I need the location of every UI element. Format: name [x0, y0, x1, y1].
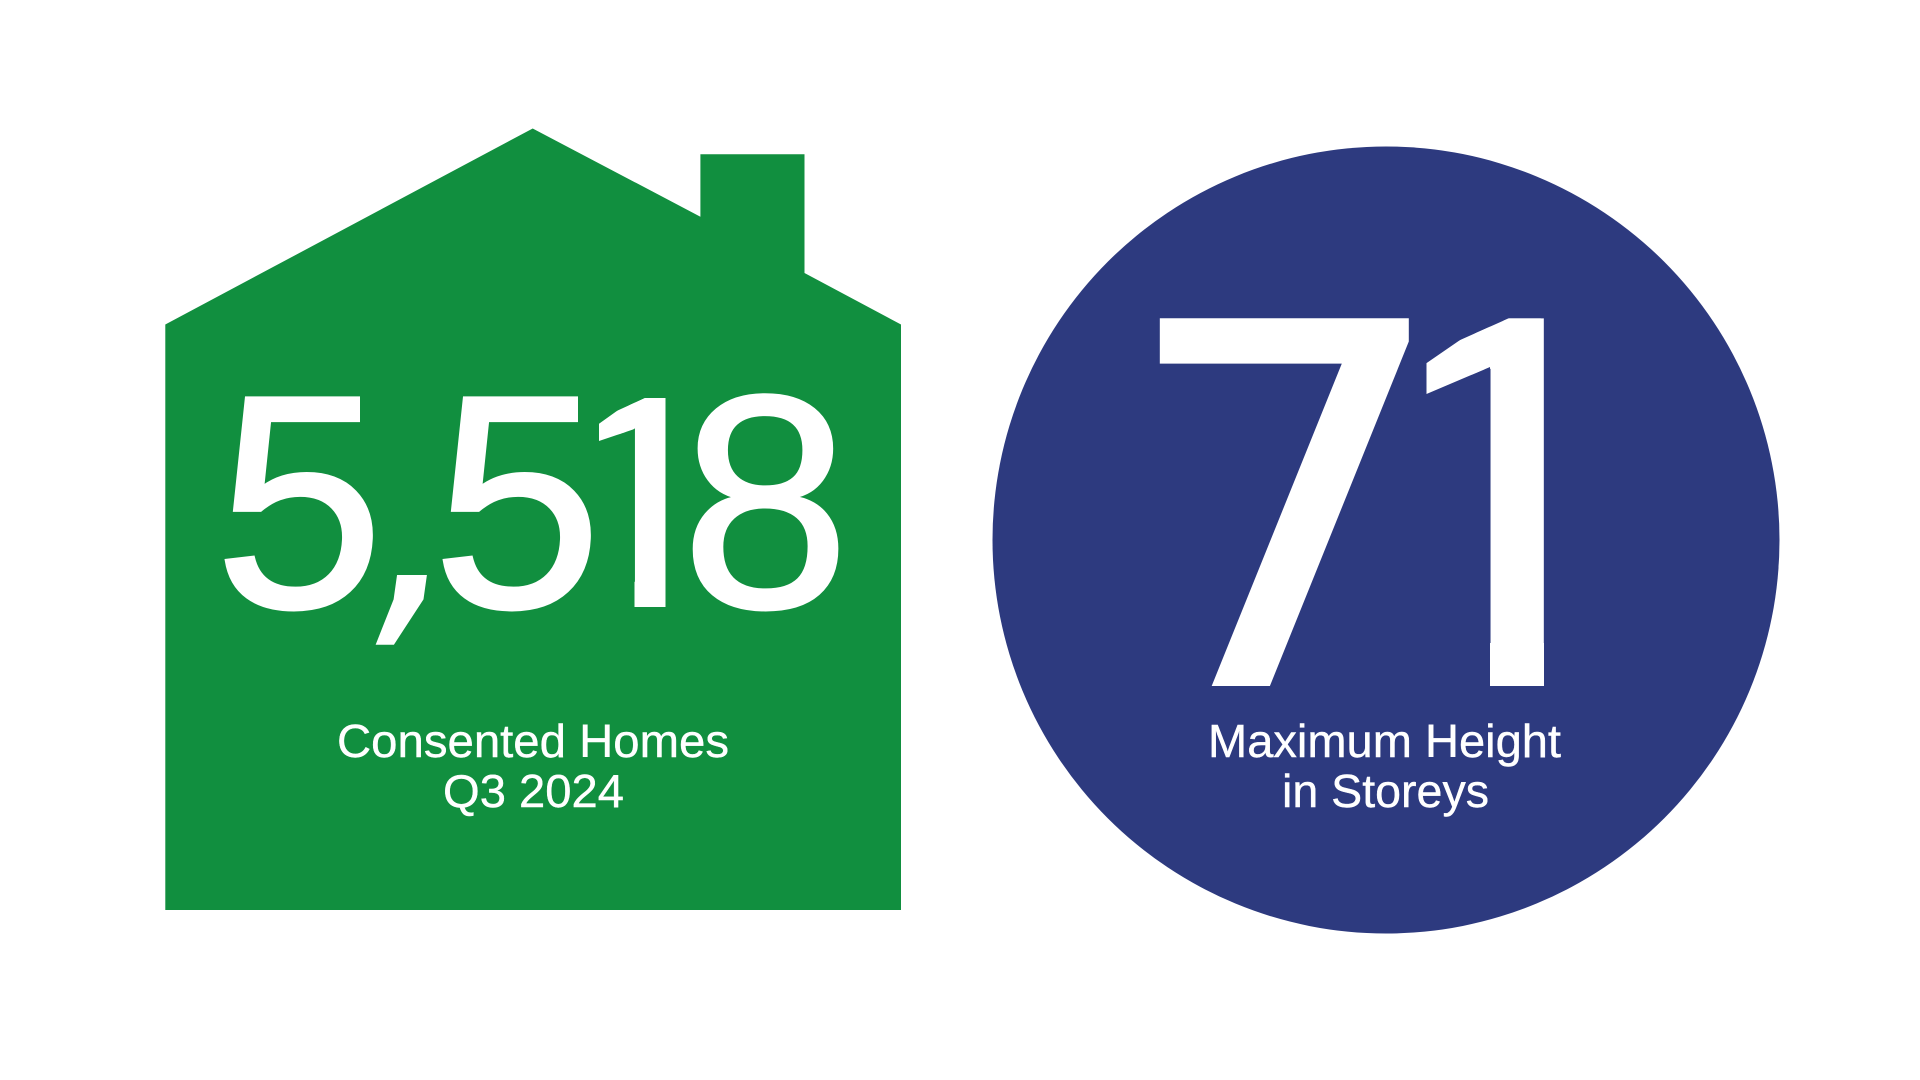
- panel: maximum height circle: [992, 146, 1780, 934]
- big number: 5,518: 8: [681, 333, 850, 672]
- big number: 71: 1: [1359, 203, 1657, 800]
- big number: 5,518: [224, 393, 838, 645]
- label: maximum height in storeys: [1208, 715, 1561, 817]
- label: consented homes: [337, 715, 729, 817]
- big number: 5,518: 5: [209, 333, 393, 672]
- label: maximum height in storeys: Maximum Height: [1208, 715, 1561, 767]
- house shape with chimney: [165, 128, 901, 910]
- label: consented homes: Q3 2024: [443, 765, 624, 817]
- big number: 71: [1160, 318, 1544, 686]
- big number: 71: 7: [1119, 222, 1451, 802]
- big number: 5,518: ,: [348, 341, 488, 680]
- big number: 5,518: 5: [427, 333, 611, 672]
- navy circle: [992, 146, 1780, 934]
- big number: 5,518: 1: [564, 333, 726, 672]
- label: consented homes: Consented Homes: [337, 715, 729, 767]
- label: maximum height in storeys: in Storeys: [1282, 765, 1489, 817]
- panel: consented homes house: [165, 128, 901, 910]
